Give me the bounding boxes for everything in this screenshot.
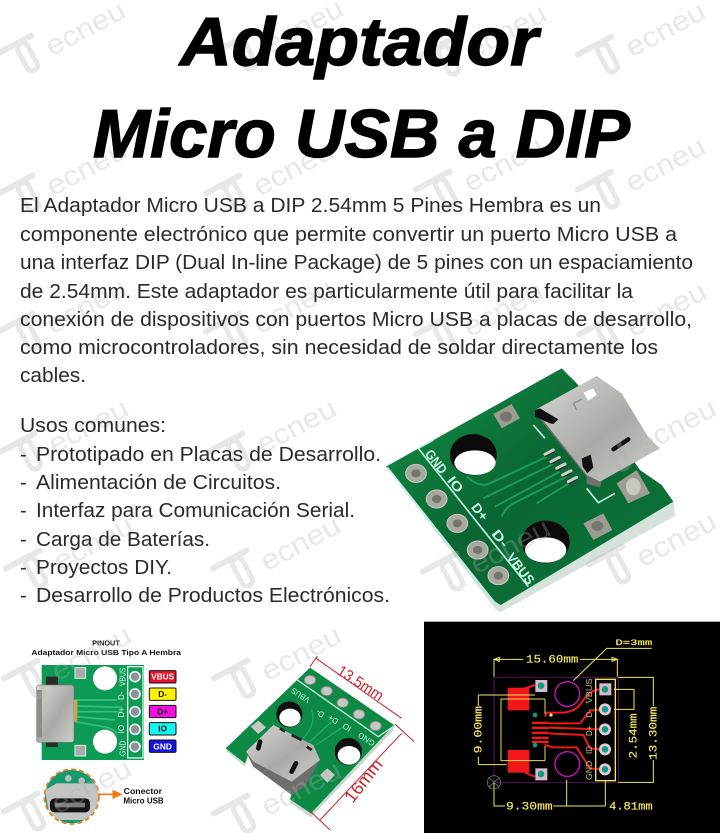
dimension values: D=3mm — [615, 638, 652, 648]
pin labels: D+ — [585, 725, 594, 736]
dimension values: 15.60mm — [526, 655, 579, 667]
arrow: to connector label — [99, 791, 121, 798]
pin legend: D- — [158, 689, 167, 699]
connector label: Conector — [124, 787, 162, 796]
title: Micro USB a DIP — [93, 96, 631, 172]
text block: common uses — [20, 415, 390, 607]
text block: description: de 2.54mm. Este adaptador es particularmente útil para facilitar la — [20, 281, 634, 303]
pin legend: IO — [158, 724, 168, 734]
watermarks: ecneu — [46, 752, 136, 820]
pin labels — [422, 447, 538, 588]
square pads — [493, 404, 650, 540]
text block: common uses: Interfaz para Comunicación Serial. — [36, 500, 355, 522]
pin labels — [585, 678, 594, 780]
text block: description: cables. — [20, 365, 86, 387]
image: pinout diagram: IO — [117, 725, 126, 733]
pin legend: VBUS — [151, 672, 175, 682]
dimension lines — [478, 648, 653, 806]
holes — [276, 701, 302, 727]
pin legend: D+ — [157, 706, 168, 716]
labels: IO — [341, 721, 353, 733]
watermarks: ecneu — [631, 505, 720, 573]
watermarks: ecneu — [43, 392, 133, 460]
pin header — [596, 679, 615, 781]
watermarks: ecneu — [256, 619, 346, 687]
board face — [386, 368, 673, 605]
labels: D+ — [326, 712, 340, 726]
watermarks: ecneu — [255, 509, 345, 577]
micro USB connector — [535, 413, 602, 487]
watermarks: ecneu — [41, 272, 131, 340]
text block: description: conexión de dispositivos con puertos Micro USB a placas de desarrollo, — [20, 309, 692, 331]
dimension values: 13.30mm — [649, 706, 661, 760]
dimension values: 2.54mm — [629, 713, 641, 758]
connector label: Micro USB — [123, 797, 164, 806]
labels: D- — [314, 707, 326, 719]
watermarks: ecneu — [46, 619, 136, 687]
pin legend: GND — [153, 741, 172, 751]
pinout connector — [37, 685, 74, 742]
watermarks: ecneu — [48, 509, 138, 577]
dimension values: 4.81mm — [609, 801, 653, 813]
dimension lines — [310, 656, 414, 830]
pin labels: VBUS — [585, 678, 594, 703]
dimension: 16mm: 16mm — [340, 755, 387, 806]
text block: common uses: Carga de Baterías. — [36, 529, 210, 551]
text block: common uses: Proyectos DIY. — [36, 557, 172, 579]
text block: common uses: - — [20, 585, 27, 607]
text block: common uses: - — [20, 557, 27, 579]
pin labels: D+ — [468, 500, 492, 524]
connector label — [123, 787, 164, 806]
title — [93, 4, 631, 172]
pin legend — [149, 671, 176, 752]
watermarks: ecneu — [461, 0, 551, 65]
connector outline — [501, 699, 545, 761]
watermarks: ecneu — [41, 134, 131, 202]
text block: description: El Adaptador Micro USB a DIP 2.54mm 5 Pines Hembra es un — [20, 195, 601, 217]
watermarks: ecneu — [458, 130, 548, 198]
connector — [246, 752, 320, 795]
text block: common uses: - — [20, 529, 27, 551]
connector pins — [545, 450, 577, 482]
dimension values: 9.30mm — [506, 801, 553, 813]
pin labels: GND — [422, 447, 450, 477]
labels: VBUS — [290, 686, 312, 705]
mounting circles — [555, 682, 580, 706]
image: pinout diagram: D+ — [117, 707, 126, 717]
pads — [304, 675, 381, 731]
text block: description: como microcontroladores, sin necesidad de soldar directamente los — [20, 337, 658, 359]
mounting holes — [450, 434, 497, 475]
watermarks: ecneu — [621, 275, 711, 343]
copper traces — [508, 688, 549, 773]
dimension values — [473, 638, 661, 813]
pin labels: D- — [489, 527, 512, 550]
pinout board — [42, 665, 144, 760]
pinout heading: PINOUT — [92, 638, 120, 647]
text block: common uses: Desarrollo de Productos Electrónicos. — [36, 585, 390, 607]
pinout heading: Adaptador Micro USB Tipo A Hembra — [31, 648, 182, 657]
labels: GND — [356, 730, 377, 748]
pin labels: IO — [444, 473, 466, 496]
text block: description: componente electrónico que permite convertir un puerto Micro USB a — [20, 224, 678, 246]
title: Adaptador — [178, 4, 542, 80]
pin labels: GND — [585, 760, 594, 780]
watermarks: ecneu — [251, 392, 341, 460]
watermarks: ecneu — [248, 272, 338, 340]
pin labels: ID — [585, 746, 594, 754]
watermarks: ecneu — [40, 0, 130, 62]
dimension: 13.5mm: 13.5mm — [334, 662, 386, 705]
watermarks: ecneu — [631, 392, 720, 460]
text block: common uses: - — [20, 472, 27, 494]
photo: main adapter board — [386, 368, 675, 612]
dimension values: 9.00mm — [473, 706, 485, 753]
watermarks: ecneu — [620, 0, 710, 63]
traces — [467, 457, 572, 517]
pin labels: VBUS — [504, 550, 538, 588]
image: pinout diagram — [31, 638, 182, 824]
text block: common uses: - — [20, 444, 27, 466]
connector close-up — [43, 770, 100, 823]
image: pinout diagram: GND — [118, 740, 127, 756]
text block: common uses: - — [20, 500, 27, 522]
watermarks: ecneu — [256, 754, 346, 822]
text block: common uses: Usos comunes: — [20, 415, 166, 437]
pin labels: D- — [585, 709, 594, 717]
watermarks: ecneu — [620, 130, 710, 198]
image: pinout diagram: D- — [117, 691, 126, 700]
board edge — [386, 467, 675, 612]
board outline — [494, 677, 618, 782]
text block: common uses: Alimentación de Circuitos. — [36, 472, 281, 494]
photo: board with dimensions — [226, 656, 414, 830]
alignment mark — [487, 776, 501, 789]
pinout heading — [31, 638, 182, 657]
text block: description — [20, 195, 693, 387]
image: pinout diagram: VBUS — [118, 668, 127, 686]
panel: PCB layout dimensions — [424, 622, 720, 833]
watermarks: ecneu — [248, 134, 338, 202]
text block: common uses: Prototipado en Placas de Desarrollo. — [36, 444, 381, 466]
text block: description: una interfaz DIP (Dual In-line Package) de 5 pines con un espaciamiento — [20, 252, 693, 274]
watermarks: ecneu — [458, 275, 548, 343]
silkscreen lines — [387, 425, 615, 606]
watermarks: ecneu — [465, 512, 555, 580]
labels — [290, 686, 377, 748]
through-hole pads — [406, 464, 509, 585]
board — [226, 668, 394, 817]
